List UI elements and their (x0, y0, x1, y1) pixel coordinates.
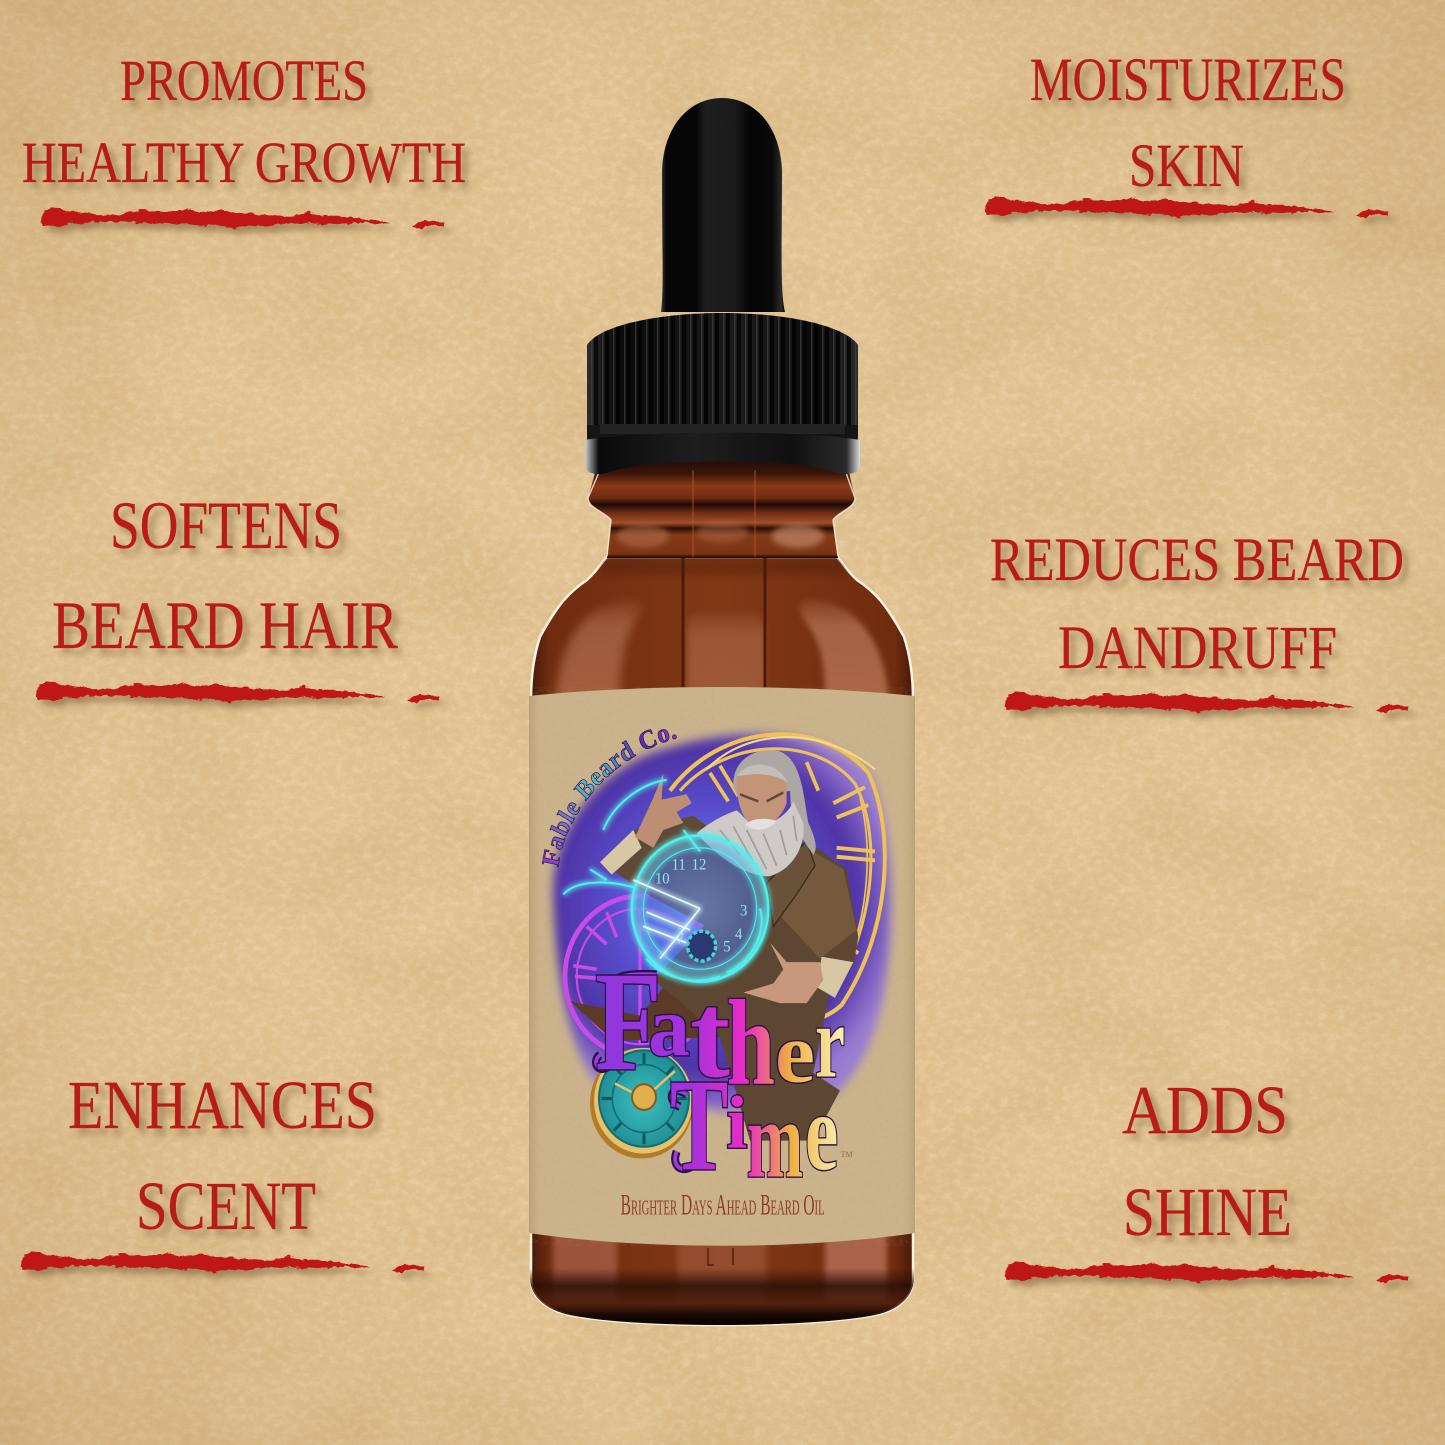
dropper bulb (661, 98, 785, 312)
pink clock face (565, 896, 715, 1057)
pocket watch (590, 1048, 693, 1159)
logo: Father Time: h (727, 976, 775, 1110)
glowing teal clock: 11 (672, 856, 686, 873)
glowing teal clock: 7 (677, 931, 684, 948)
tagline: Brighter Days Ahead Beard Oil (621, 1189, 825, 1222)
callout: adds shine: SHINE (1123, 1174, 1292, 1250)
callout: softens beard hair: SOFTENS (110, 487, 342, 563)
logo: Father Time: m (747, 1079, 803, 1201)
glowing teal clock (563, 780, 768, 982)
gold clock face (670, 734, 885, 1026)
glowing teal clock: 5 (723, 938, 731, 956)
callout: promotes healthy growth (22, 48, 466, 230)
label artwork: Father Time illustration and logo (542, 727, 896, 1222)
logo: Father Time: r (815, 984, 845, 1099)
callout: moisturizes skin: MOISTURIZES (1030, 47, 1346, 114)
amber glass body (530, 455, 914, 1330)
callout: moisturizes skin: SKIN (1129, 133, 1244, 200)
callout: enhances scent (22, 1067, 424, 1274)
callout: enhances scent: ENHANCES (68, 1067, 377, 1143)
callout: moisturizes skin (986, 47, 1388, 219)
product: dropper bottle (529, 98, 915, 1326)
logo: Father Time: T (670, 1051, 728, 1198)
callout: softens beard hair: BEARD HAIR (52, 587, 399, 663)
logo: Father Time: e (775, 1005, 815, 1100)
callout: reduces beard dandruff: DANDRUFF (1058, 615, 1337, 682)
logo: Fable Beard Co.: Fable Beard Co. (542, 729, 677, 868)
callout: promotes healthy growth: HEALTHY GROWTH (22, 130, 466, 195)
ribbed cap (585, 313, 860, 474)
wizard coat (570, 816, 858, 1141)
trademark mark: TM (841, 1150, 853, 1159)
purple swirl backdrop (553, 734, 891, 1112)
callout: reduces beard dandruff (990, 527, 1408, 714)
logo: Father Time: t (690, 969, 730, 1103)
glowing teal clock: 10 (655, 870, 670, 888)
logo: Father Time (595, 942, 845, 1201)
callout: promotes healthy growth: PROMOTES (120, 48, 368, 113)
glass neck (588, 455, 855, 558)
callout: adds shine: ADDS (1122, 1072, 1288, 1148)
glowing teal clock: 3 (740, 902, 747, 920)
callout: enhances scent: SCENT (136, 1168, 316, 1244)
glowing teal clock: 12 (692, 856, 706, 873)
paper label (529, 687, 915, 1246)
logo: Father Time: e (805, 1072, 838, 1194)
callout: adds shine (1006, 1072, 1408, 1284)
logo: Father Time: F (595, 942, 662, 1100)
callout: softens beard hair (37, 487, 439, 704)
logo: Father Time: i (727, 1081, 747, 1164)
hair and beard (697, 750, 816, 876)
logo: Father Time: a (648, 978, 690, 1074)
glowing teal clock: 4 (735, 925, 743, 943)
open right hand (743, 942, 823, 1003)
raised left hand (635, 773, 692, 848)
